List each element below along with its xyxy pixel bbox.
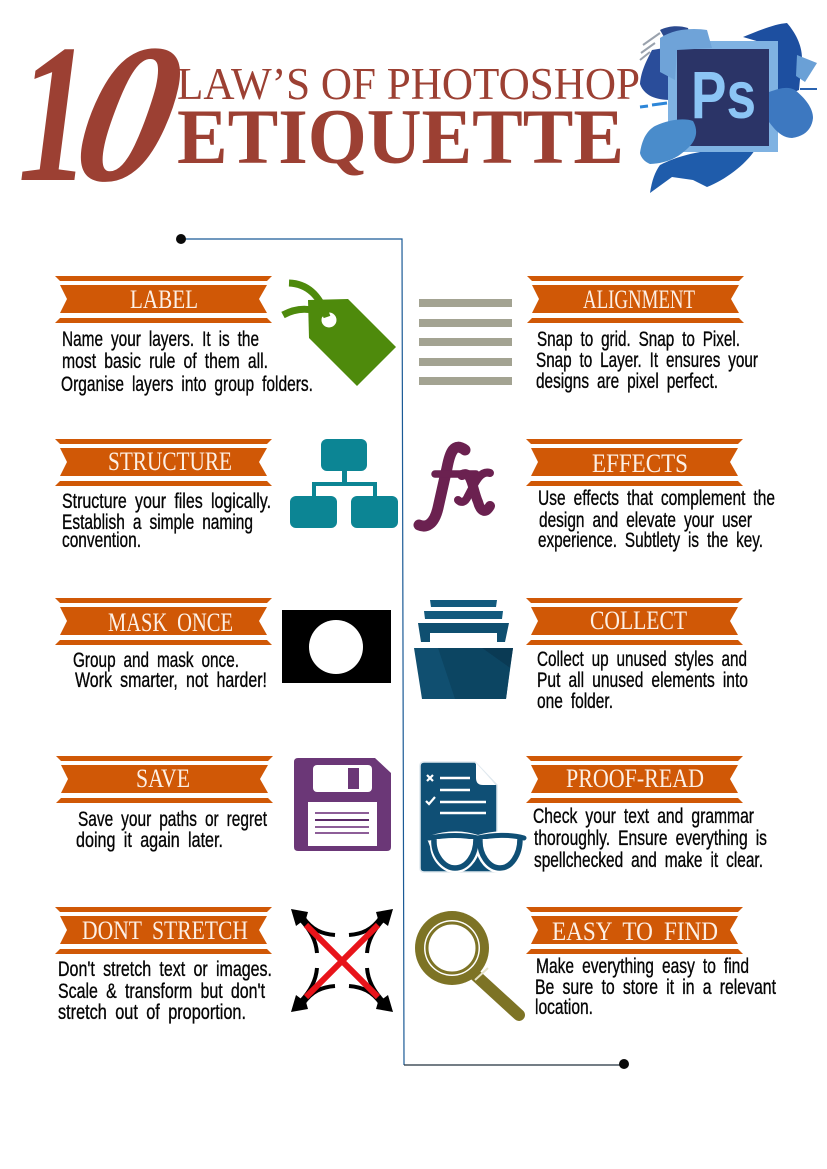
text: structure: convention. [62,529,141,552]
text: alignment [536,328,758,393]
banner: easy to find: EASY TO FIND [552,917,718,946]
text: label: Organise layers into group folders. [61,373,313,396]
text: easy to find: location. [535,996,593,1019]
text: alignment: designs are pixel perfect. [536,370,718,393]
banner: easy to find [526,907,743,954]
title number 10: 0 [59,5,199,224]
banner: dont stretch [55,907,272,954]
icon: mask [282,610,391,683]
banner: structure: STRUCTURE [108,447,232,476]
panel: effects [419,439,775,552]
text: effects [538,487,775,552]
banner: proof-read: PROOF-READ [566,764,704,793]
icon: stretch arrows [291,909,393,1012]
text: structure: Structure your files logically. [62,490,271,513]
text: label [61,328,313,396]
text: collect: one folder. [537,690,613,713]
banner: collect: COLLECT [590,606,687,635]
text: easy to find: Make everything easy to find [536,955,749,978]
text: mask once: Work smarter, not harder! [75,669,267,692]
text: label: most basic rule of them all. [62,350,268,373]
text: effects: design and elevate your user [539,509,752,532]
text: label: Name your layers. It is the [62,328,259,351]
banner: collect [526,598,743,645]
banner: mask once: MASK ONCE [108,608,233,637]
icon: document with glasses [420,762,524,872]
icon: alignment lines [419,299,512,385]
panel: dont stretch [55,907,393,1024]
title number 10: 1 [18,4,90,223]
text: mask once: Group and mask once. [73,649,239,672]
banner: alignment: ALIGNMENT [583,285,695,314]
text: dont stretch: Scale & transform but don't [58,980,265,1003]
banner: save: SAVE [136,764,190,793]
banner: save [56,756,273,803]
banner: effects: EFFECTS [592,449,688,478]
timeline connector [176,234,629,1069]
title [18,4,640,224]
title line: law's of photoshop: LAW’S OF PHOTOSHOP [177,59,640,109]
title line: etiquette: ETIQUETTE [177,93,624,180]
panel: proof-read [420,756,767,872]
icon: photoshop logo [640,23,817,193]
banner: effects [526,439,743,486]
banner: label [55,276,272,323]
banner: alignment [527,276,744,323]
panel: collect [414,598,748,713]
panel: label [55,276,396,396]
text: save: doing it again later. [76,829,223,852]
icon: photoshop logo: Ps [691,58,756,133]
text: save [76,808,267,852]
text: dont stretch [58,958,272,1024]
banner: structure [55,439,272,486]
text: structure [62,490,271,552]
text: collect [537,648,748,713]
text: save: Save your paths or regret [78,808,267,831]
text: mask once [73,649,267,692]
icon: hierarchy [290,439,398,528]
text: structure: Establish a simple naming [62,511,253,534]
icon: folder [414,600,513,699]
text: dont stretch: Don't stretch text or images. [58,958,272,981]
panel: save [56,756,391,852]
panel: alignment [419,276,758,393]
text: collect: Put all unused elements into [537,669,748,692]
text: proof-read [533,805,767,872]
panel: easy to find [415,907,776,1019]
banner: dont stretch: DONT STRETCH [82,916,248,945]
banner: mask once [55,598,272,645]
text: easy to find [535,955,776,1019]
icon: tag [283,283,396,386]
icon: fx [419,447,490,526]
icon: magnifying glass [415,911,519,1015]
panel: structure [55,439,398,552]
banner: label: LABEL [130,285,198,314]
text: collect: Collect up unused styles and [537,648,747,671]
panel: mask once [55,598,391,692]
icon: floppy disk [294,758,391,851]
text: dont stretch: stretch out of proportion. [58,1001,246,1024]
text: proof-read: Check your text and grammar [533,805,754,828]
text: alignment: Snap to grid. Snap to Pixel. [537,328,740,351]
banner: proof-read [526,756,743,803]
